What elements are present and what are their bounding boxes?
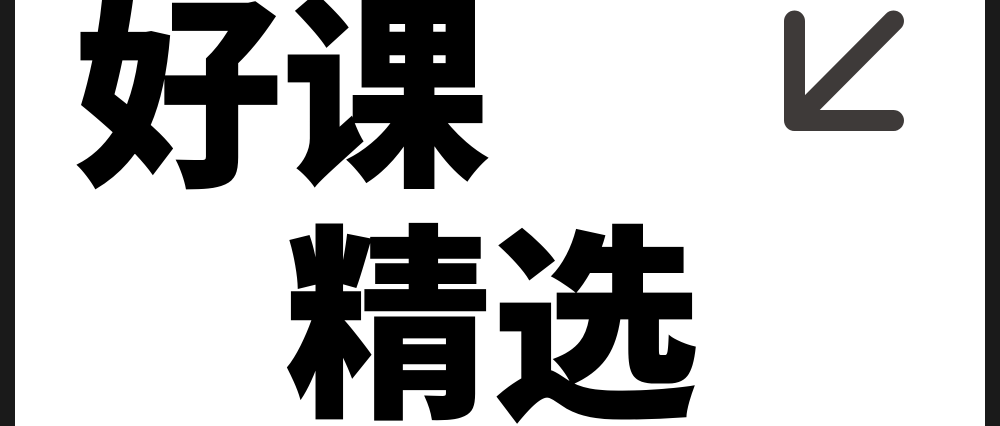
left border: [0, 0, 15, 426]
icon: arrow pointing down-left: [784, 10, 904, 131]
right border: [985, 0, 1000, 426]
